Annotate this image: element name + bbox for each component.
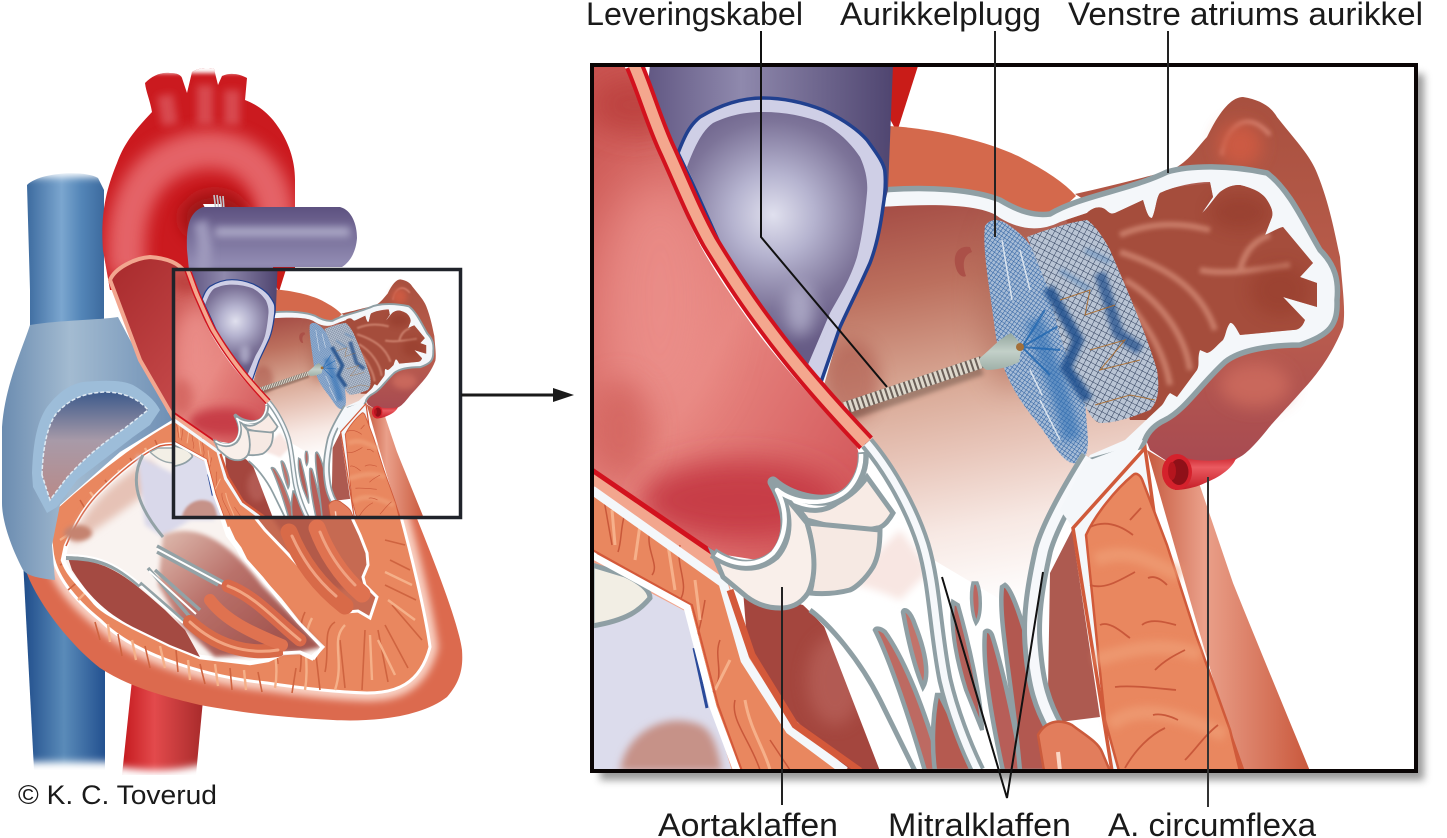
aurikkelplugg device (984, 220, 1158, 463)
left atrial dome (885, 126, 1076, 220)
aortic wall bands (592, 65, 866, 553)
copyright: © K. C. Toverud (18, 780, 217, 810)
heart outer wall (25, 400, 462, 720)
pulmonary artery section (640, 65, 893, 385)
right ventricle cavity (63, 445, 322, 663)
leader: A. circumflexa (1207, 477, 1209, 807)
left ventricle lower cavity (253, 510, 377, 618)
right atrium (2, 317, 172, 580)
posterior left ventricular wall (1048, 530, 1100, 722)
myocardium (51, 420, 430, 693)
leader: Mitralklaffen (942, 572, 1043, 798)
ligament remnant (203, 195, 224, 212)
spring delivery cable (845, 362, 982, 416)
ascending aorta cut section (110, 257, 263, 448)
superior vena cava (15, 155, 115, 340)
leader: Leveringskabel (761, 31, 887, 387)
pulmonary artery (187, 207, 357, 320)
inferior vena cava (15, 560, 120, 780)
auricle outer wall (1075, 97, 1344, 483)
enlargement frame contents (reduced copy of inset) (175, 271, 436, 516)
leader: Aurikkelplugg (994, 31, 996, 237)
enlargement frame (174, 270, 460, 518)
papillary muscle (1038, 722, 1110, 771)
posterior mitral leaflet (1032, 440, 1143, 728)
descending aorta (115, 680, 205, 785)
circumflex artery (1162, 454, 1236, 490)
inset shadow (600, 74, 1424, 780)
left atrium and appendage (815, 167, 1337, 730)
anterior mitral leaflet (867, 443, 978, 771)
lateral myocardium with white bands (1073, 448, 1243, 771)
dark left ventricular wall, septum (743, 590, 915, 771)
outflow tract myocardium (592, 470, 860, 771)
arrow to enlargement (461, 388, 574, 402)
leader: Aortaklaffen (781, 587, 783, 805)
aortic valve cusps (713, 452, 893, 608)
leader: Venstre atriums aurikkel (1167, 31, 1169, 173)
aortic arch (102, 68, 295, 290)
aortic arch fragment (885, 66, 918, 132)
panel: enlarged view (590, 65, 1416, 771)
device connector hub (980, 333, 1024, 370)
right ventricular outflow area (592, 553, 742, 771)
ascending aorta lumen (590, 65, 882, 565)
chordae area (810, 530, 1058, 771)
inset frame (592, 65, 1416, 771)
lateral wall outside (1147, 450, 1310, 771)
